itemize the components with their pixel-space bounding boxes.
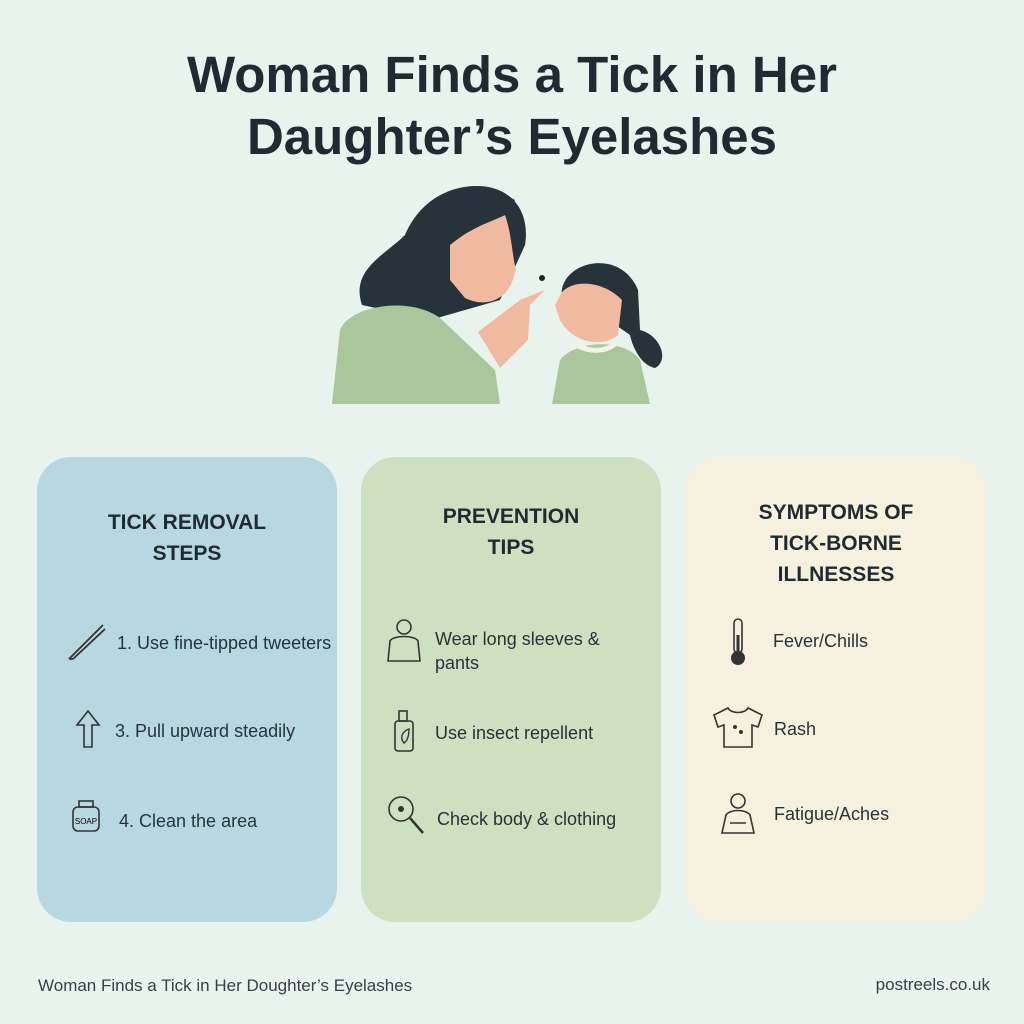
panel: prevention tips	[361, 457, 661, 922]
heading	[443, 505, 579, 559]
title: Woman Finds a Tick in Her	[187, 46, 837, 103]
icon: magnifier	[388, 796, 424, 834]
icon: arrow up	[75, 710, 101, 748]
child body	[552, 344, 650, 404]
icon: spray	[394, 710, 414, 752]
panel: tick removal steps	[37, 457, 337, 922]
title: Daughter’s Eyelashes	[247, 108, 777, 165]
symptom 3: Fatigue/Aches	[774, 804, 889, 824]
child face	[555, 284, 622, 342]
mother face	[450, 211, 516, 302]
tip 1: pants	[435, 653, 479, 673]
heading: TICK-BORNE	[770, 532, 902, 555]
symptom 2: Rash	[774, 719, 816, 739]
icon: soap: SOAP	[75, 817, 97, 826]
tip 2: Use insect repellent	[435, 723, 593, 743]
symptom 1: Fever/Chills	[773, 631, 868, 651]
heading: STEPS	[153, 542, 221, 565]
icon: shirt rash	[713, 706, 763, 748]
icon: soap	[72, 800, 100, 832]
tip 1	[435, 629, 600, 673]
tip 1: Wear long sleeves &	[435, 629, 600, 649]
heading: TICK REMOVAL	[108, 511, 266, 534]
step 3: 3. Pull upward steadily	[115, 721, 295, 741]
heading	[108, 511, 266, 565]
tip 3: Check body & clothing	[437, 809, 616, 829]
hand	[478, 290, 545, 368]
icon: thermometer	[731, 618, 745, 665]
icon: tweezers	[68, 624, 106, 660]
heading	[759, 501, 913, 586]
illustration: mother and daughter	[332, 186, 662, 404]
mother body	[332, 306, 500, 404]
heading: PREVENTION	[443, 505, 579, 528]
panel: symptoms	[686, 457, 986, 922]
child hair	[561, 263, 662, 368]
icon: person	[387, 619, 421, 662]
mother hair	[360, 186, 526, 320]
heading: SYMPTOMS OF	[759, 501, 913, 524]
icon: tired person	[721, 793, 755, 834]
heading: TIPS	[488, 536, 534, 559]
footer: source title: Woman Finds a Tick in Her Doughter’s Eyelashes	[38, 976, 412, 995]
footer: site: postreels.co.uk	[876, 975, 990, 994]
title	[187, 46, 837, 165]
tick	[539, 275, 545, 281]
heading: ILLNESSES	[778, 563, 894, 586]
step 1: 1. Use fine-tipped tweeters	[117, 633, 331, 653]
step 4: 4. Clean the area	[119, 811, 257, 831]
